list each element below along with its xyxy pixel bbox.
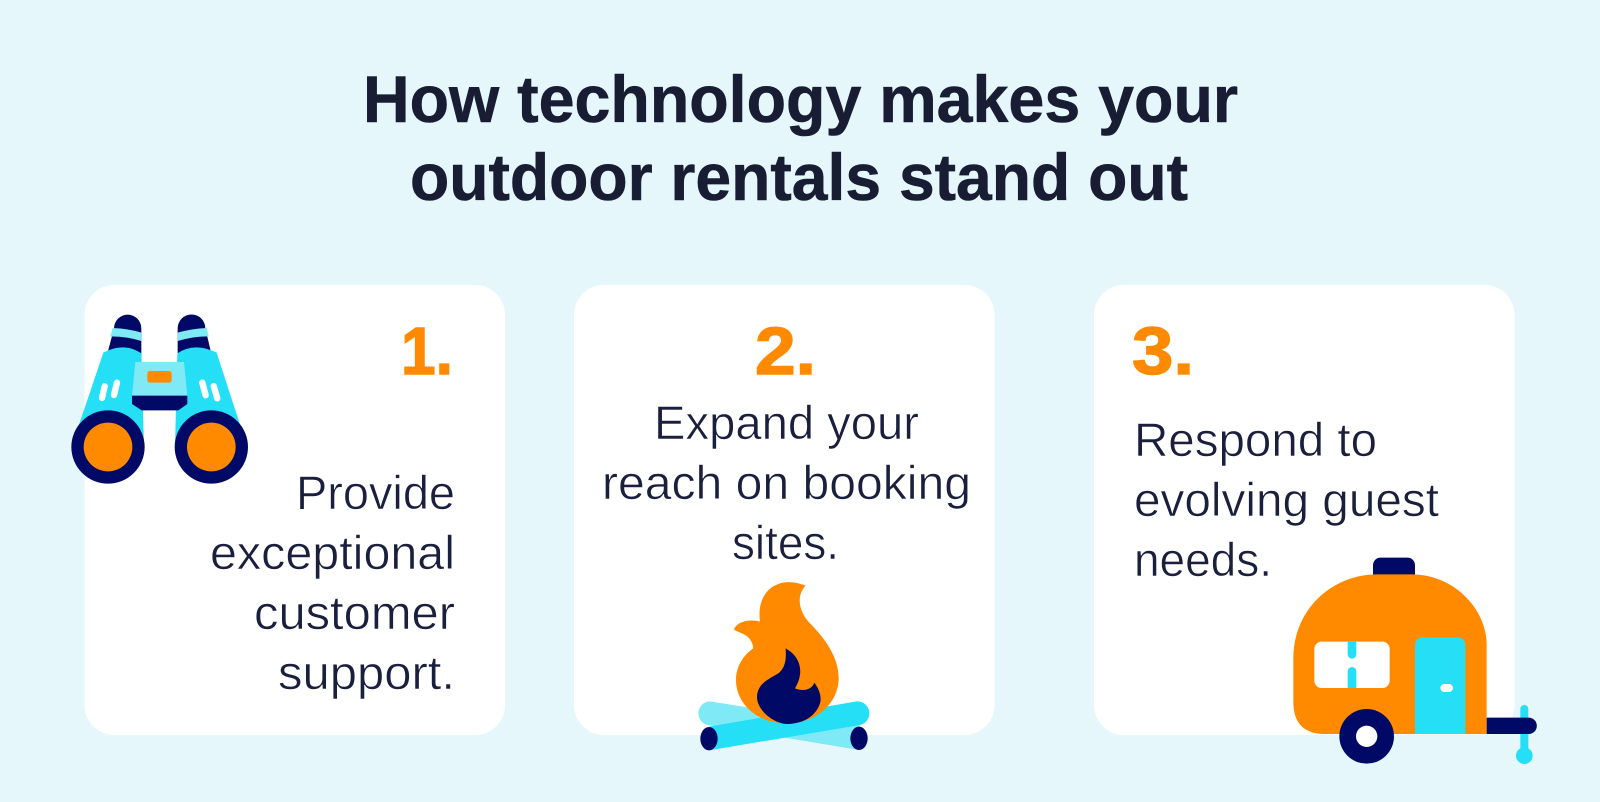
card 1 text: support. xyxy=(278,646,455,699)
card 1 text: customer xyxy=(254,586,455,639)
card 2 number: 2. xyxy=(755,314,816,389)
card 3 number: 3. xyxy=(1132,314,1194,389)
card 3 text: evolving guest xyxy=(1134,473,1439,526)
panel: card 2 xyxy=(574,285,994,750)
card 3 text: Respond to xyxy=(1134,413,1377,466)
title xyxy=(363,62,1238,214)
card 2 text: reach on booking xyxy=(602,456,971,509)
card 1 text: Provide xyxy=(296,466,455,519)
icon: binoculars xyxy=(71,314,248,484)
card 1 text xyxy=(210,466,455,699)
card 1 background xyxy=(84,285,505,735)
card 2 text: sites. xyxy=(732,516,839,569)
panel: card 1 xyxy=(71,285,505,735)
icon: campfire xyxy=(698,582,869,750)
card 1 number: 1. xyxy=(401,314,453,389)
card 1 text: exceptional xyxy=(210,526,455,579)
icon: camper trailer xyxy=(1293,558,1537,764)
title: outdoor rentals stand out xyxy=(410,140,1188,214)
card 2 text xyxy=(602,396,971,569)
panel: card 3 xyxy=(1094,285,1537,764)
card 2 background xyxy=(574,285,994,735)
card 3 background xyxy=(1094,285,1514,735)
card 2 text: Expand your xyxy=(654,396,919,449)
title: How technology makes your xyxy=(363,62,1238,136)
card 3 text xyxy=(1134,413,1439,586)
card 3 text: needs. xyxy=(1134,533,1272,586)
